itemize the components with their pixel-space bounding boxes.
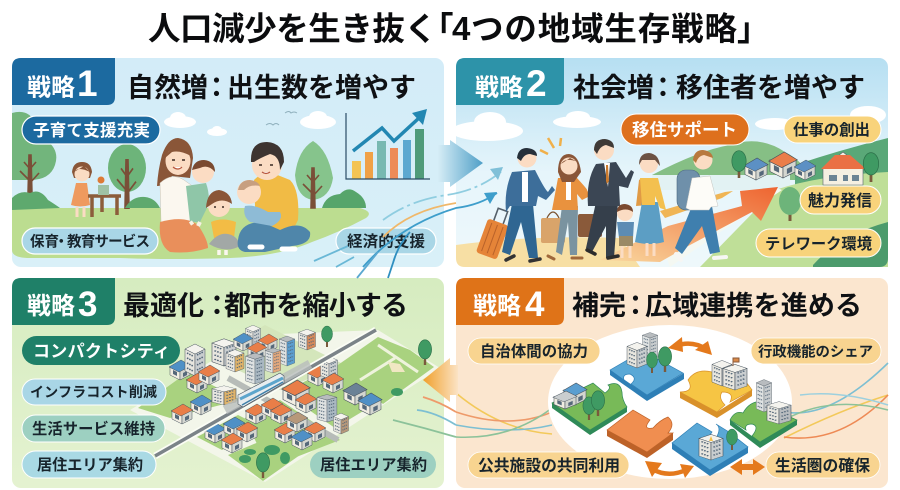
migrant: woman and child <box>617 153 666 258</box>
small yellow arrow <box>660 191 733 218</box>
girl in yellow <box>206 190 240 255</box>
heading 4: 補完 <box>572 291 626 321</box>
heading tab 1 <box>12 58 115 105</box>
arrow heads in flow <box>484 167 503 204</box>
pill: financial support: 経済的支援 <box>347 232 425 250</box>
heading tab 2: 2 <box>526 63 547 104</box>
big orange arrow <box>600 187 778 262</box>
pill: job creation <box>784 116 881 143</box>
heading 4: 広域連携を進める <box>645 291 862 321</box>
birds <box>266 112 297 125</box>
pill: job creation: 仕事の創出 <box>793 120 870 139</box>
heading 4: ： <box>622 291 649 321</box>
migrant: woman in orange <box>541 154 590 259</box>
pill: attractiveness promotion <box>800 186 881 214</box>
title: 4 <box>452 10 471 47</box>
heading tab 3 <box>12 278 115 325</box>
heading tab 4: 4 <box>525 285 545 324</box>
pill: attractiveness promotion: 魅力発信 <box>808 191 872 210</box>
double arrow top <box>668 337 712 355</box>
heading tab 2: 戦略 <box>475 74 523 102</box>
panel 4 background <box>456 278 888 488</box>
pill: compact city <box>22 336 180 365</box>
pill: childcare and education <box>22 228 158 254</box>
park ground <box>12 208 369 259</box>
panel 3 background <box>12 278 444 488</box>
double arrow bottom left <box>645 461 694 478</box>
pill: childcare and education: ・ <box>54 234 68 250</box>
heading 1: 自然増 <box>127 73 208 103</box>
migrant: man in suit <box>578 139 634 258</box>
migrant: backpacker <box>675 150 726 260</box>
flow lines between panels <box>314 170 503 437</box>
heading tab 1: 戦略 <box>27 74 75 102</box>
heading tab 4 <box>456 278 564 325</box>
heading 1: ： <box>203 73 230 103</box>
pill: relocation support: 移住サポート <box>632 120 737 140</box>
bar chart <box>346 109 430 179</box>
arrow: strategy 1 to 2 <box>438 140 483 187</box>
railway and train <box>155 330 376 456</box>
puzzle piece: yellow <box>680 358 752 418</box>
heading 1: 出生数を増やす <box>227 73 416 103</box>
heading tab 2 <box>456 58 564 105</box>
pill: relocation support <box>621 114 749 145</box>
heading 2: ： <box>650 73 676 103</box>
migrant: man with suitcase <box>476 148 555 261</box>
pill: infrastructure cost <box>22 379 166 405</box>
clouds <box>451 106 886 141</box>
puzzle piece: green right <box>730 380 797 448</box>
pill: infrastructure cost: インフラコスト削減 <box>30 384 157 400</box>
panel: strategy 2 <box>451 58 888 267</box>
puzzle piece: blue top <box>610 332 684 401</box>
white ellipse <box>548 325 792 479</box>
pill: telework environment: テレワーク環境 <box>765 236 873 253</box>
panel 2 background <box>456 58 888 267</box>
pill: residential area left: 居住エリア集約 <box>37 456 143 474</box>
puzzle piece: green left <box>552 383 627 435</box>
mother and toddler <box>157 138 215 252</box>
pill: childcare and education: 教育サービス <box>67 232 150 250</box>
title: 」 <box>737 11 770 47</box>
pill: childcare and education: 保育 <box>30 234 59 250</box>
panel 1 background <box>12 58 444 267</box>
pill: childcare support: 子育て支援充実 <box>33 120 150 140</box>
panel: strategy 1 <box>12 58 444 267</box>
heading tab 1: 1 <box>77 63 98 104</box>
pill: inter-municipal cooperation: 自治体間の協力 <box>480 342 588 360</box>
pill: shared public facilities <box>468 452 629 478</box>
pill: childcare support <box>22 116 160 144</box>
pill: sharing admin functions: 行政機能のシェア <box>758 342 873 360</box>
heading 3: ： <box>204 291 230 321</box>
ground <box>456 172 888 267</box>
pill: living services: 生活サービス維持 <box>32 420 155 438</box>
pill: residential area left <box>22 451 156 478</box>
father and baby <box>237 142 310 252</box>
heading 3: 都市を縮小する <box>224 291 408 321</box>
title: 人口減少を生き抜く <box>148 11 437 47</box>
panel: strategy 3 <box>12 278 444 488</box>
isometric city ground <box>130 325 440 482</box>
double arrow bottom right <box>730 459 765 475</box>
pill: residential area right <box>310 451 436 478</box>
pill: residential area right: 居住エリア集約 <box>320 456 427 474</box>
heading tab 4: 戦略 <box>473 293 521 320</box>
girl at table <box>71 162 121 217</box>
pill: financial support <box>336 228 436 254</box>
heading 3: 最適化 <box>123 291 204 321</box>
trees and bushes <box>12 112 366 210</box>
title: つの地域生存戦略 <box>471 11 737 47</box>
title: 「 <box>421 11 454 47</box>
heading 2: 社会増 <box>573 73 654 103</box>
pill: shared public facilities: 公共施設の共同利用 <box>478 457 620 475</box>
pill: compact city: コンパクトシティ <box>33 342 170 361</box>
arrow: strategy 4 to 3 <box>423 358 458 402</box>
pill: living services <box>22 415 165 442</box>
heading 2: 移住者を増やす <box>676 73 865 103</box>
puzzle piece: blue bottom <box>672 423 748 476</box>
flow lines <box>456 363 888 438</box>
pill: securing living area <box>766 452 880 478</box>
heading tab 3: 戦略 <box>27 293 75 320</box>
pill: sharing admin functions <box>751 338 881 364</box>
pill: telework environment <box>756 229 881 257</box>
sparkle marks <box>540 138 561 154</box>
pill: securing living area: 生活圏の確保 <box>775 456 870 475</box>
buildings <box>169 325 432 478</box>
clouds <box>164 111 336 136</box>
panel: strategy 4 <box>456 278 888 488</box>
pill: inter-municipal cooperation <box>468 338 600 364</box>
puzzle piece: orange <box>607 410 673 458</box>
hills <box>652 138 888 190</box>
village houses <box>732 151 879 221</box>
heading tab 3: 3 <box>78 285 97 324</box>
